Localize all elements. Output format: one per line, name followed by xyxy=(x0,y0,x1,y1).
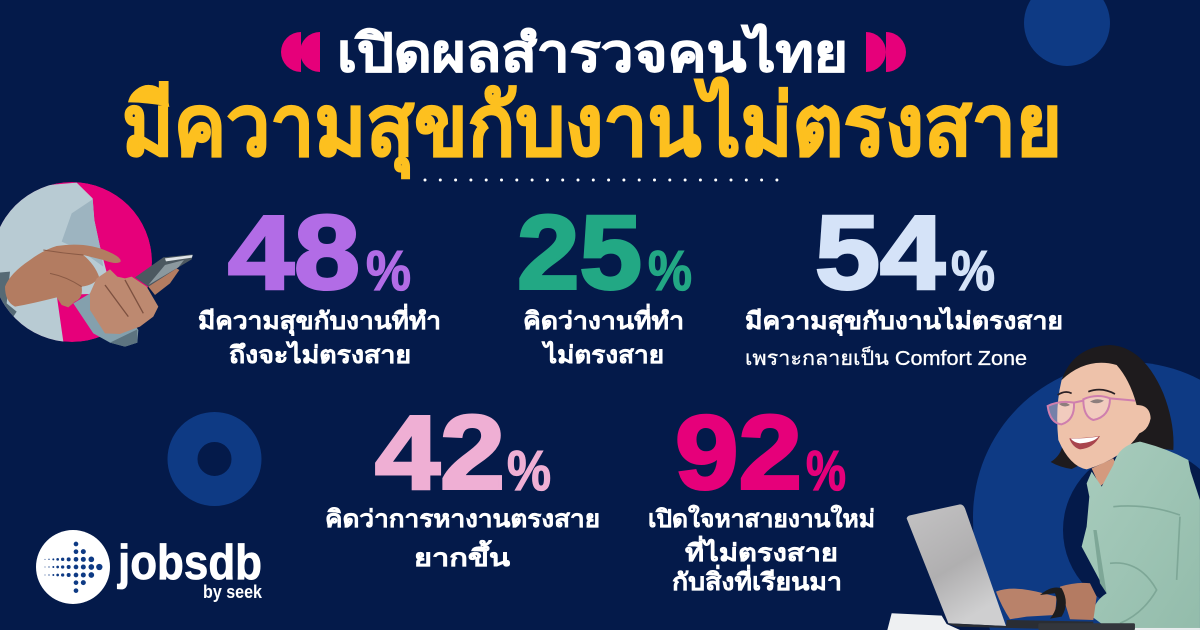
number: 42 xyxy=(375,394,505,512)
stat: 92 percent xyxy=(648,394,875,596)
heading: second line: มีความสุขกับงานไม่ตรงสาย xyxy=(122,77,1062,179)
green shirt xyxy=(1082,442,1200,630)
neck xyxy=(1092,458,1114,486)
stat: 42 percent: % xyxy=(507,439,551,503)
stat: 48 percent xyxy=(198,194,441,369)
caption: มีความสุขกับงานที่ทำ xyxy=(198,303,441,337)
stat: 48 percent: % xyxy=(366,239,411,303)
phone xyxy=(135,254,193,287)
icon: left quote marks xyxy=(281,32,320,72)
number: 48 xyxy=(228,194,360,312)
tagline: by seek xyxy=(203,582,263,602)
caption: คิดว่าการหางานตรงสาย xyxy=(325,506,600,533)
dotted divider xyxy=(425,178,777,182)
eyes xyxy=(1059,399,1104,406)
tablet edge xyxy=(1038,623,1135,630)
heading: first line: เปิดผลสำรวจคนไทย xyxy=(337,23,848,83)
wordmark: jobsdb xyxy=(117,536,262,590)
book xyxy=(887,613,960,630)
stat: 42 percent: ยากขึ้น xyxy=(414,539,511,572)
photo: hands holding phone xyxy=(0,182,193,347)
holding hand xyxy=(90,269,158,334)
stat: 92 percent: กับสิ่งที่เรียนมา xyxy=(672,564,842,596)
number: 25 xyxy=(517,194,642,312)
photo: smiling woman with laptop xyxy=(887,345,1200,630)
laptop lid xyxy=(907,504,1006,626)
number: 54 xyxy=(815,194,945,312)
forearm and hand xyxy=(1060,583,1097,620)
decorative circle: top right xyxy=(1024,0,1110,66)
stat: 25 percent: ไม่ตรงสาย xyxy=(541,340,664,369)
logo: jobsdb by seek xyxy=(36,530,263,604)
glasses xyxy=(1048,396,1135,424)
icon: dotted arrow badge xyxy=(36,530,110,604)
stat: 92 percent: % xyxy=(806,439,846,503)
stat: 48 percent: ถึงจะไม่ตรงสาย xyxy=(229,340,411,369)
hair xyxy=(1051,345,1174,469)
finger behind phone xyxy=(148,268,179,295)
caption: เปิดใจหาสายงานใหม่ xyxy=(648,504,875,533)
stat: 54 percent xyxy=(745,194,1063,370)
decorative ring xyxy=(182,427,246,491)
stat: 54 percent: % xyxy=(951,239,995,303)
watch xyxy=(1040,587,1066,619)
near sleeve xyxy=(73,293,138,347)
caption: มีความสุขกับงานไม่ตรงสาย xyxy=(745,306,1063,337)
blue backdrop circle xyxy=(973,362,1200,630)
laptop base xyxy=(947,620,1093,629)
stat: 42 percent xyxy=(325,394,600,572)
stat: 92 percent: ที่ไม่ตรงสาย xyxy=(685,535,838,567)
smile xyxy=(1069,436,1100,449)
pointing hand xyxy=(5,245,121,307)
face xyxy=(1057,363,1151,469)
stat: 54 percent: เพราะกลายเป็น Comfort Zone xyxy=(745,345,1027,370)
title line 1 with quote marks xyxy=(281,23,906,83)
caption: คิดว่างานที่ทำ xyxy=(523,303,684,335)
icon: right quote marks xyxy=(866,32,906,72)
pink circle and sweater xyxy=(0,182,152,343)
stat: 25 percent: % xyxy=(648,239,692,303)
number: 92 xyxy=(675,394,802,512)
stat: 25 percent xyxy=(517,194,692,369)
eyebrows xyxy=(1058,390,1115,395)
